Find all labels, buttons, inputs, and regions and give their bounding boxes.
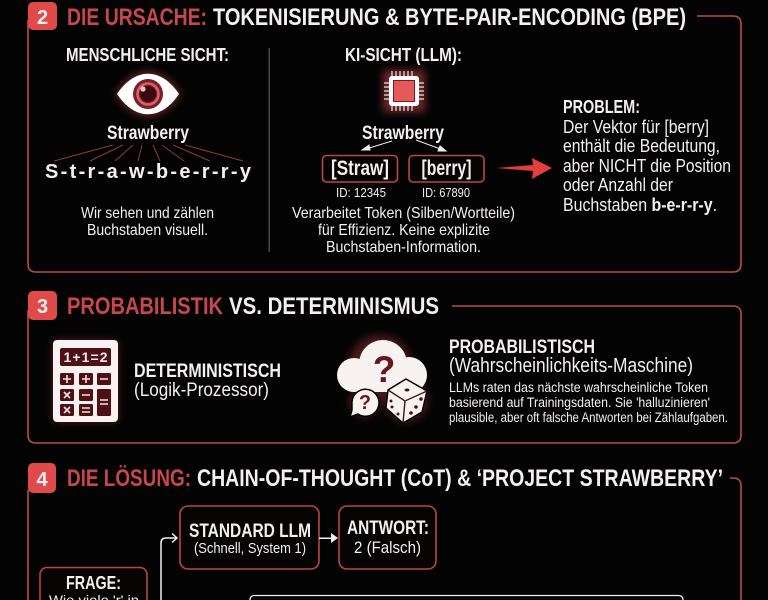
heading 2 <box>67 4 686 31</box>
arrow: question to standard LLM <box>161 534 177 600</box>
problem text: enthält die Bedeutung, <box>563 136 720 156</box>
token box berry <box>409 156 484 182</box>
AI view caption: für Effizienz. Keine explizite <box>318 222 490 239</box>
AI view caption <box>292 205 515 256</box>
panel 3 frame <box>28 306 741 443</box>
probabilistic text: (Wahrscheinlichkeits-Maschine) <box>449 355 693 377</box>
question box <box>40 568 147 600</box>
panel: Probabilistik vs. Determinismus <box>28 291 741 443</box>
arrow: LLM to answer <box>319 533 338 543</box>
problem text: Der Vektor für [berry] <box>563 117 709 137</box>
heading 3: VS. DETERMINISMUS <box>229 293 439 320</box>
icon: cloud and dice <box>337 335 428 423</box>
panel: die Lösung <box>28 463 741 600</box>
standard LLM box: (Schnell, System 1) <box>194 540 306 557</box>
token ids: ID: 67890 <box>422 185 470 200</box>
problem text: Buchstaben b-e-r-r-y. <box>563 195 717 215</box>
probabilistic text: LLMs raten das nächste wahrscheinliche Token <box>449 380 708 395</box>
arrow: to problem <box>496 158 552 179</box>
badge 2: 2 <box>37 7 48 29</box>
spelled letters: S - t - r - a - w - b - e - r - r - y <box>45 161 252 183</box>
fan lines to letters <box>54 145 243 161</box>
human view caption: Buchstaben visuell. <box>87 222 208 239</box>
token box Straw: [Straw] <box>331 157 389 180</box>
standard LLM box: STANDARD LLM <box>189 521 311 542</box>
human view caption: Wir sehen und zählen <box>81 205 214 222</box>
probabilistic text: PROBABILISTISCH <box>449 337 595 358</box>
icon: calculator <box>53 340 118 422</box>
AI view caption: Buchstaben-Information. <box>326 239 481 256</box>
standard LLM box <box>180 506 319 569</box>
problem text: PROBLEM: <box>563 97 640 117</box>
badge 2 <box>28 2 57 30</box>
deterministic label: (Logik-Prozessor) <box>134 380 269 401</box>
chain-of-thought box <box>250 596 683 600</box>
token ids <box>336 185 470 200</box>
word Strawberry: Strawberry <box>107 123 189 144</box>
human view column <box>45 45 252 239</box>
heading 2: TOKENISIERUNG & BYTE-PAIR-ENCODING (BPE) <box>213 4 686 31</box>
human view caption <box>81 205 214 239</box>
badge 3: 3 <box>37 296 48 318</box>
probabilistic text <box>449 337 728 425</box>
icon: chip <box>383 70 425 112</box>
probabilistic text: plausible, aber oft falsche Antworten bei Zählaufgaben. <box>449 410 728 425</box>
icon: calculator: 1+1=2 <box>64 349 108 365</box>
problem text: oder Anzahl der <box>563 175 673 195</box>
answer box: ANTWORT: <box>347 518 429 539</box>
icon: eye <box>115 72 181 116</box>
badge 4 <box>28 463 56 493</box>
AI view caption: Verarbeitet Token (Silben/Wortteile) <box>292 205 515 222</box>
split arrows <box>362 140 446 151</box>
badge 4: 4 <box>36 469 48 491</box>
heading 4: DIE LÖSUNG: <box>67 465 191 492</box>
probabilistic text: basierend auf Trainingsdaten. Sie 'halluzinieren' <box>449 395 710 410</box>
icon: cloud and dice: ? <box>373 349 395 390</box>
token box berry: [berry] <box>422 157 472 180</box>
panel: die Ursache <box>28 2 741 272</box>
badge 3 <box>28 291 57 320</box>
icon: cloud and dice: ? <box>359 392 371 414</box>
heading 3: PROBABILISTIK <box>67 293 224 320</box>
deterministic label: DETERMINISTISCH <box>134 361 281 382</box>
token ids: ID: 12345 <box>336 185 386 200</box>
panel 4 frame <box>28 478 741 600</box>
word Strawberry: Strawberry <box>362 123 444 144</box>
heading 3 <box>67 293 439 320</box>
problem text: aber NICHT die Position <box>563 156 731 176</box>
AI view column <box>292 45 515 256</box>
column divider <box>268 48 270 252</box>
problem text <box>563 97 731 215</box>
question box: FRAGE: <box>66 573 121 593</box>
answer box: 2 (Falsch) <box>354 538 421 557</box>
answer box <box>339 506 436 569</box>
AI view heading: KI-SICHT (LLM): <box>345 45 462 65</box>
human view heading: MENSCHLICHE SICHT: <box>66 45 229 65</box>
heading 2: DIE URSACHE: <box>67 4 207 31</box>
deterministic label <box>134 361 281 401</box>
panel 2 frame <box>28 16 741 272</box>
